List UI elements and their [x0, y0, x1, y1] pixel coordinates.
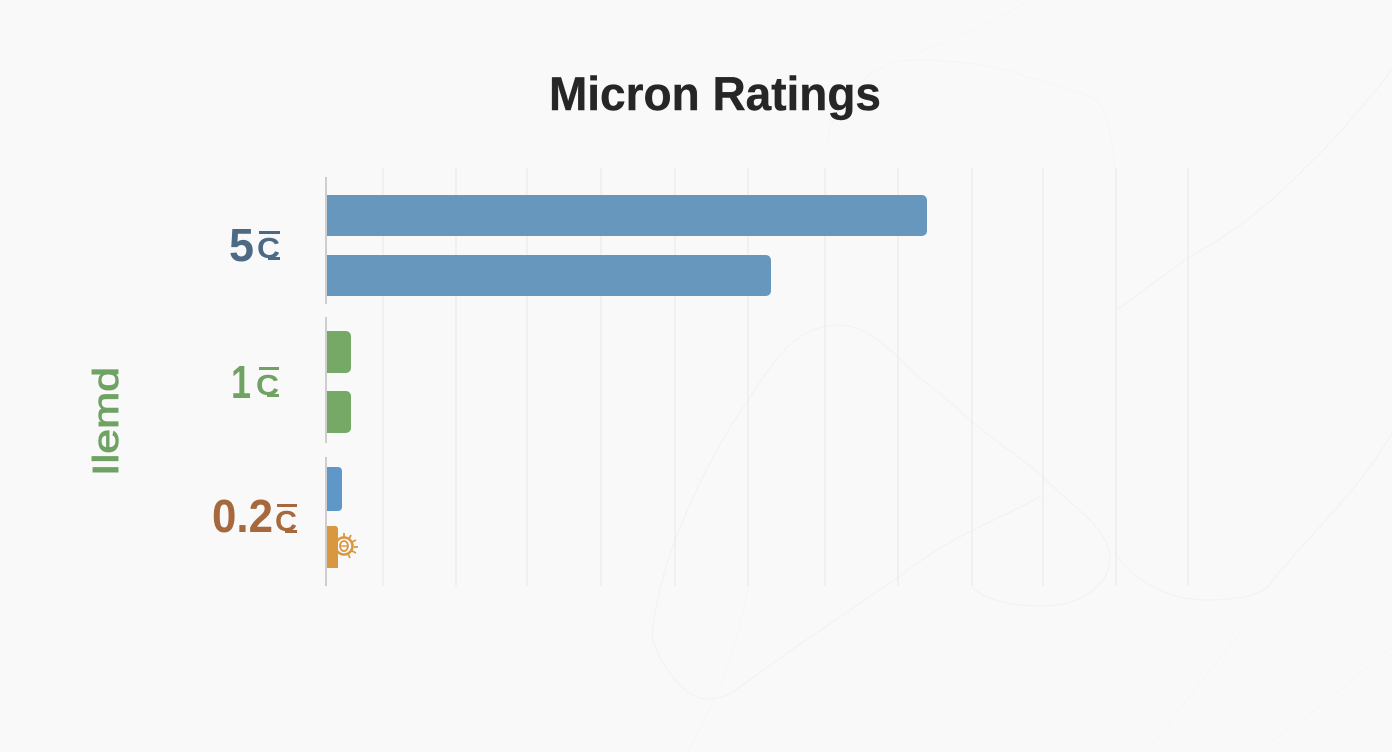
- row label: 5: [229, 219, 280, 271]
- row label: 1: 1: [231, 356, 251, 408]
- bar: 0.2 micron first: [327, 467, 342, 511]
- axis line segments: [325, 177, 327, 586]
- bar: 1 micron second: [327, 391, 351, 433]
- row label: 1: [231, 356, 279, 408]
- title: Micron Ratings: [549, 67, 881, 120]
- grid lines: [383, 168, 1188, 586]
- legend label: Ilemd: [85, 367, 126, 476]
- row label: 5: 5: [229, 219, 254, 271]
- row label: 5: C: [257, 233, 280, 265]
- icon: orange gear: [336, 533, 358, 558]
- row label: 0.2: 0.2: [212, 490, 273, 542]
- bar: 5 micron first: [327, 195, 927, 236]
- bar: 1 micron first: [327, 331, 351, 373]
- bar: 5 micron second: [327, 255, 771, 296]
- row label: 1: C: [256, 370, 279, 402]
- row label: 0.2: C: [275, 506, 297, 538]
- bar: 0.2 micron second: [327, 526, 338, 568]
